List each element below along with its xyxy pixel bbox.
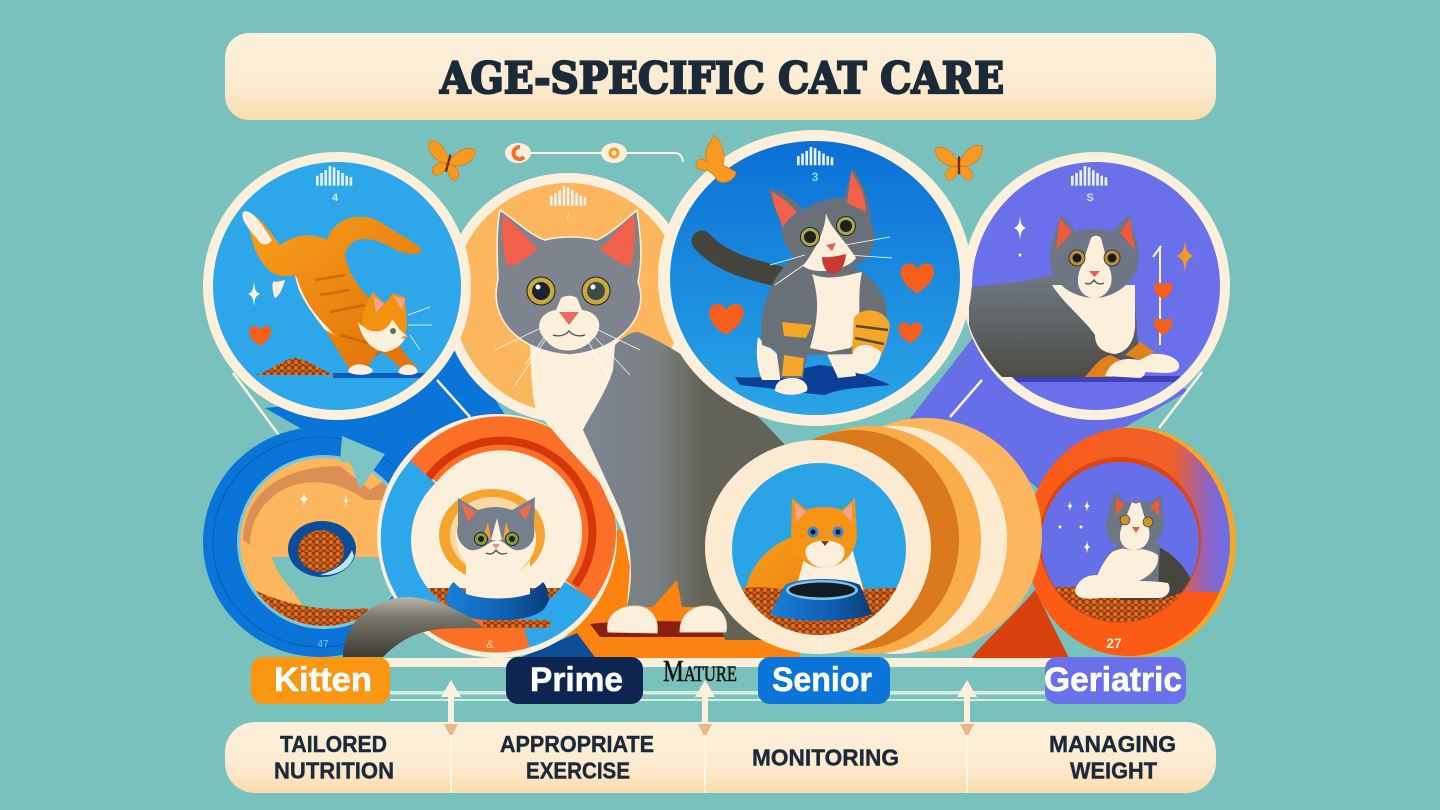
- bottom cream strip: [310, 658, 1170, 667]
- panel: prime top circle: [443, 173, 693, 423]
- panel: adult top circle: 3: [812, 170, 819, 184]
- label: &: [486, 639, 494, 651]
- stage label: geriatric: Geriatric: [1044, 661, 1182, 699]
- label: 3: [817, 640, 823, 652]
- panel: prime ring: [377, 414, 617, 660]
- title text: AGE-SPECIFIC CAT CARE: [439, 54, 1004, 104]
- panel: kitten top circle: 4: [332, 192, 339, 204]
- panel: kitten feeding ring: [203, 428, 397, 657]
- panel: senior ring stack: [705, 418, 1042, 654]
- grey body and legs: [583, 332, 790, 640]
- icon: sparkles: [1058, 500, 1090, 554]
- chest: [530, 340, 640, 607]
- eyes: [527, 277, 610, 305]
- nose and mouth: [559, 312, 579, 325]
- paws: [608, 606, 657, 633]
- arrows between stages: [441, 680, 977, 793]
- tip: appropriate exercise: [500, 731, 654, 784]
- icon: lying grey cat: [969, 215, 1179, 378]
- tip: monitoring: MONITORING: [752, 744, 899, 770]
- orange ground: [560, 530, 800, 660]
- panel: bottom left illustrations: [203, 414, 1236, 662]
- tip: tailored nutrition: [274, 731, 394, 784]
- tip: managing weight: [1049, 731, 1176, 784]
- panel: geriatric ring: [970, 427, 1236, 662]
- icon: food dish: [288, 521, 356, 577]
- stage label: kitten: Kitten: [274, 661, 372, 699]
- icon: orange cat: [745, 498, 866, 640]
- tip: tailored nutrition: NUTRITION: [274, 758, 394, 784]
- stage label: prime: [506, 657, 643, 704]
- icon: large cat tail: [343, 597, 484, 657]
- icon: butterfly on ring: [696, 135, 736, 182]
- panel: prime top circle: /: [567, 212, 570, 223]
- label: 47: [317, 639, 329, 650]
- stage label: mature: Mature: [663, 653, 737, 688]
- tip: appropriate exercise: APPROPRIATE: [500, 731, 654, 757]
- icon: kibble pile: [255, 358, 335, 375]
- stage label: kitten: [251, 657, 390, 704]
- panel: care tips bar: [225, 722, 1216, 793]
- ears: [502, 215, 538, 266]
- panel: geriatric top circle: S: [1086, 192, 1094, 204]
- icon: sparkles: [300, 491, 349, 507]
- timeline lines: [390, 691, 1045, 701]
- icon: sparkles and hearts: [1014, 216, 1194, 345]
- panel: geriatric top circle: [962, 152, 1230, 420]
- butterfly icons: [422, 138, 982, 184]
- icon: playful cat: [702, 168, 892, 395]
- tip: appropriate exercise: EXERCISE: [526, 758, 630, 784]
- stage label: senior: Senior: [772, 661, 872, 699]
- timeline connector: [505, 143, 683, 163]
- whiskers: [495, 326, 640, 385]
- icon: hearts: [709, 264, 934, 343]
- icon: shadow: [735, 365, 890, 395]
- tip: managing weight: MANAGING: [1049, 731, 1176, 757]
- stage label: prime: Prime: [530, 661, 623, 699]
- icon: orange kitten: [242, 211, 432, 375]
- icon: blue bowl: [445, 582, 549, 621]
- panel: adult top circle: [658, 130, 972, 426]
- connector shapes behind circles: [233, 335, 1202, 490]
- icon: blue bowl: [770, 579, 872, 621]
- icon: sparkle and heart: [248, 282, 271, 346]
- tip: managing weight: WEIGHT: [1070, 758, 1157, 784]
- icon: sitting grey cat: [1075, 492, 1191, 600]
- stage label: senior: [758, 657, 890, 704]
- panel: large grey cat: [495, 210, 790, 640]
- label: 27: [1106, 635, 1122, 651]
- head: [496, 210, 641, 355]
- tip: tailored nutrition: TAILORED: [280, 731, 387, 757]
- title banner: [225, 33, 1216, 120]
- icon: calico cat: [456, 497, 536, 598]
- muzzle: [539, 296, 599, 350]
- panel: kitten top circle: [203, 152, 471, 420]
